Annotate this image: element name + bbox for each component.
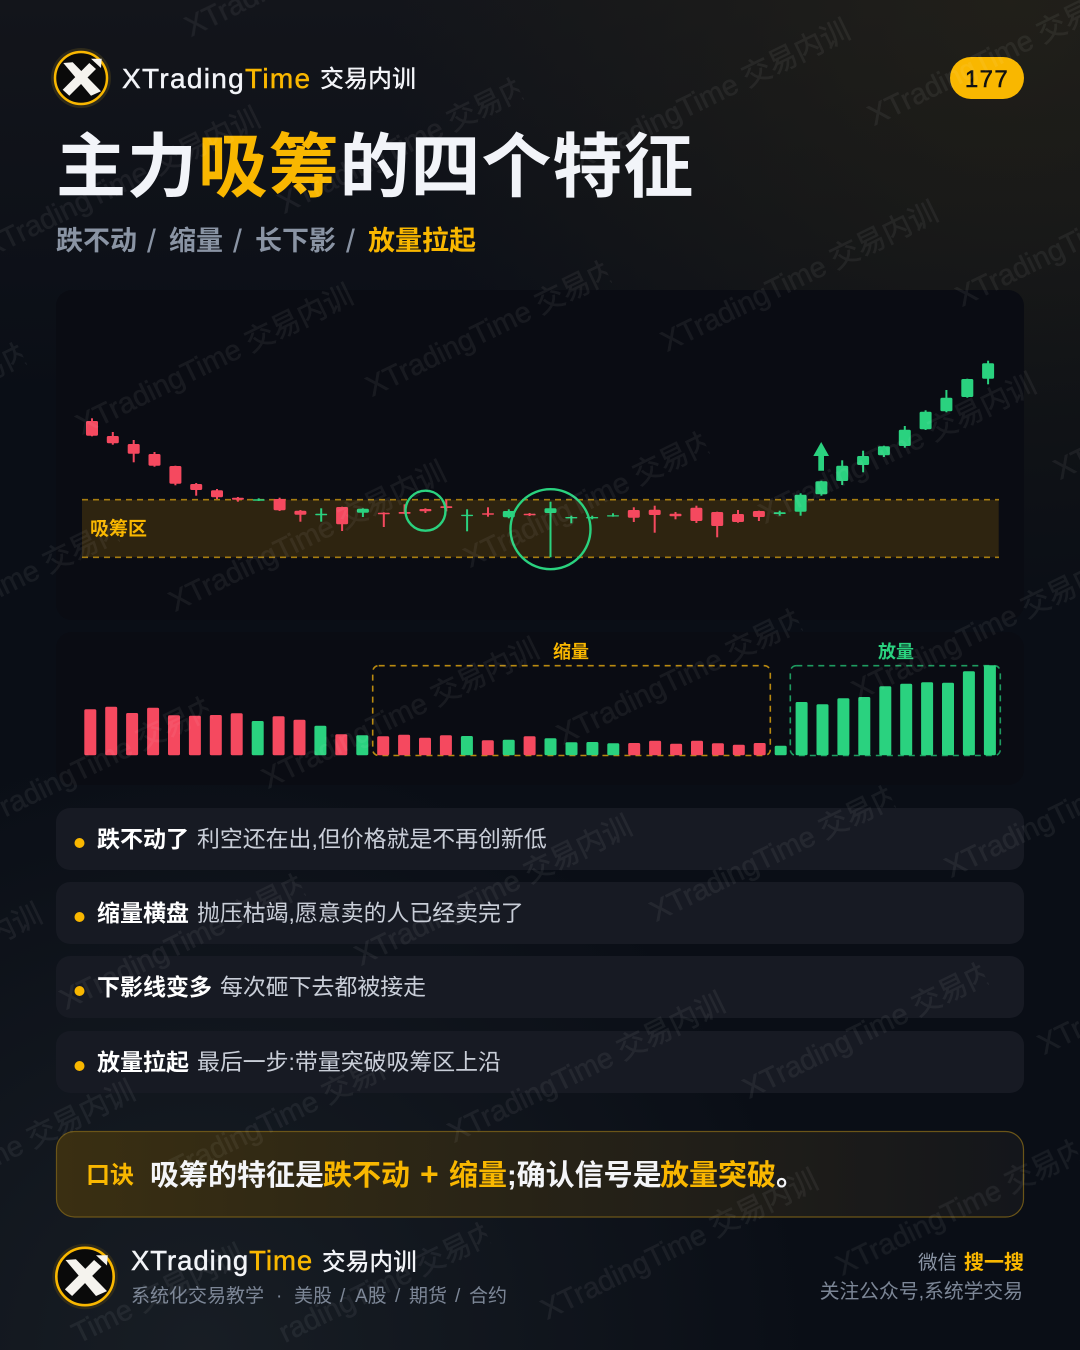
expanding volume box [790, 642, 1000, 756]
callout: mnemonic: 缩量 [449, 1159, 507, 1192]
watermark: XTradingTime 交易内训 [645, 765, 932, 928]
footer tagline [131, 1285, 507, 1307]
footer tagline: · [276, 1286, 282, 1307]
watermark: Time 交易内训 [67, 1238, 250, 1350]
list row 3: 下影线变多 [97, 974, 212, 1000]
highlight circle small [406, 491, 446, 531]
footer wechat call to action: 搜一搜 [964, 1251, 1024, 1274]
title: 主力吸筹的四个特征 [56, 128, 694, 206]
accumulation zone [82, 500, 999, 557]
expanding volume box: 放量 [878, 642, 914, 662]
accumulation zone: 吸筹区 [90, 518, 147, 540]
green volume bars [252, 665, 996, 755]
footer tagline: 合约 [469, 1285, 507, 1307]
highlight circle large [510, 489, 590, 569]
watermark: XTradingTime 交易内训 [164, 455, 451, 618]
footer tagline: / [455, 1286, 461, 1307]
list row 4: 最后一步:带量突破吸筹区上沿 [197, 1049, 501, 1075]
callout: mnemonic [56, 1132, 1024, 1217]
list row 2: 缩量横盘 [97, 900, 189, 926]
watermark: XTradingTime 交易内训 [536, 1163, 823, 1326]
footer tagline: A股 [355, 1286, 387, 1307]
watermark: XTradingTime 交易内训 [738, 942, 1025, 1105]
subtitle: 放量拉起 [368, 225, 476, 256]
footer tagline: 美股 [294, 1285, 332, 1307]
watermark: XTradingTime 交易内训 [55, 853, 342, 1016]
footer tagline: 期货 [409, 1285, 447, 1307]
footer tagline: / [395, 1286, 401, 1307]
header brand name [122, 63, 416, 94]
list row 4: 放量拉起 [97, 1049, 189, 1075]
panel: candlestick chart [56, 290, 1024, 620]
issue number badge: 177 [965, 66, 1009, 93]
footer wechat call to action: 微信 [918, 1252, 957, 1274]
list row 1: 跌不动了 [97, 826, 189, 852]
footer tagline: 系统化交易教学 [131, 1285, 264, 1307]
subtitle: 长下影 [255, 226, 336, 256]
watermark: XTradingTime 交易内训 [148, 1030, 435, 1193]
footer brand name: 交易内训 [322, 1249, 417, 1276]
list row 1 [56, 808, 1024, 870]
callout: mnemonic: 放量突破 [660, 1159, 776, 1192]
list row 2: 抛压枯竭,愿意卖的人已经卖完了 [197, 900, 524, 926]
issue number badge [950, 57, 1024, 99]
watermark: XTradingTime 交易内训 [443, 986, 730, 1149]
red volume bars [84, 707, 766, 755]
red candles [86, 418, 765, 537]
footer wechat call to action: 关注公众号,系统学交易 [820, 1281, 1023, 1303]
subtitle: / [233, 223, 242, 259]
subtitle: 缩量 [169, 226, 223, 256]
panel: volume chart [56, 632, 1024, 785]
callout: mnemonic: ;确认信号是 [507, 1159, 662, 1192]
list row 1: 利空还在出,但价格就是不再创新低 [197, 826, 547, 852]
subtitle [56, 223, 476, 259]
green candles [253, 361, 994, 557]
list row 4 [56, 1031, 1024, 1093]
watermark: XTradingTime 交易内训 [552, 588, 839, 751]
watermark: XTradingTime 交易内训 [350, 809, 637, 972]
footer logo [52, 1244, 118, 1309]
shrinking volume box: 缩量 [553, 641, 589, 662]
watermark: XTradingTime 交易内训 [568, 13, 855, 176]
subtitle: / [147, 223, 156, 259]
header logo [51, 48, 111, 108]
footer brand name: XTradingTime [131, 1245, 313, 1276]
subtitle: 跌不动 [56, 226, 137, 256]
list row 3 [56, 956, 1024, 1018]
breakout arrow [813, 442, 829, 471]
list row 2 [56, 882, 1024, 944]
header brand name: XTradingTime [122, 63, 311, 94]
footer brand name [131, 1245, 417, 1276]
callout: mnemonic: 吸筹的特征是 [150, 1159, 324, 1192]
callout: mnemonic: 口诀 [86, 1162, 134, 1189]
shrinking volume box [373, 641, 770, 756]
callout: mnemonic: + [420, 1156, 439, 1192]
watermark: XTradingTime 交易内训 [754, 367, 1041, 530]
callout: mnemonic: 。 [776, 1160, 805, 1192]
watermark: radingTime 交易内训 [274, 1202, 529, 1349]
footer tagline: / [340, 1286, 346, 1307]
header brand name: 交易内训 [320, 66, 416, 93]
watermark: XTradingTime 交易内训 [459, 411, 746, 574]
subtitle: / [346, 223, 355, 259]
watermark: XTradingTime 交易内训 [656, 195, 943, 358]
watermark: XTradingTime 交易内训 [71, 278, 358, 441]
watermark: XTradingTime 交易内训 [257, 632, 544, 795]
watermark: XTradingTime 交易内训 [273, 57, 560, 220]
list row 3: 每次砸下去都被接走 [220, 974, 426, 1000]
footer wechat call to action [820, 1251, 1024, 1303]
watermark: XTradingTime 交易内训 [361, 240, 648, 403]
callout: mnemonic: 跌不动 [323, 1159, 410, 1192]
